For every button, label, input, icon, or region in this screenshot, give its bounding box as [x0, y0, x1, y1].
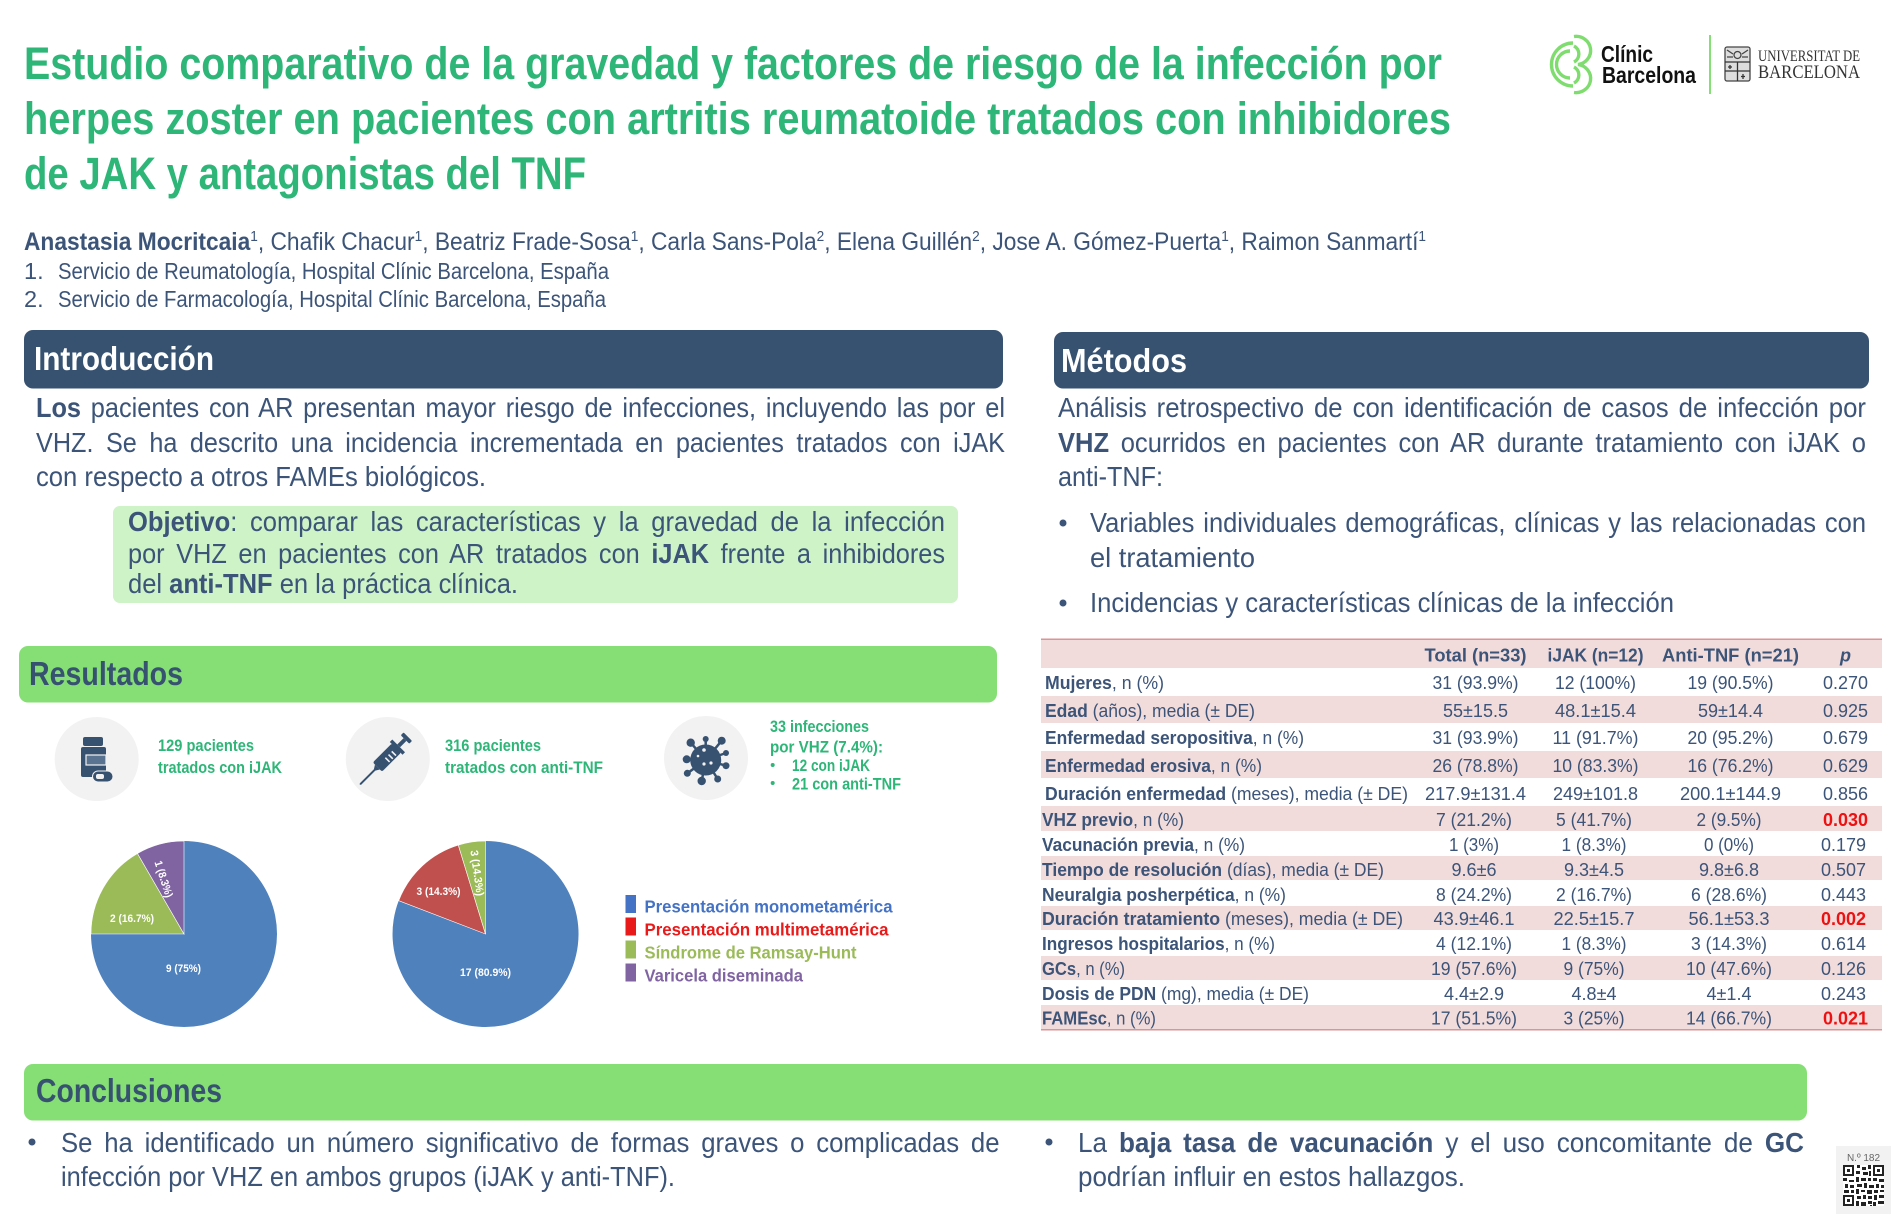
row: VHZ previo: 7 (21.2%)	[1436, 810, 1512, 830]
pie chart: anti-TNF: 3 (14.3%)	[416, 886, 461, 898]
bullet list: métodos: Incidencias y características clínicas de la infección	[1090, 587, 1674, 618]
panel: introducción	[24, 330, 1006, 603]
panel: conclusiones	[24, 1064, 1807, 1192]
text block: conclusion 2	[1046, 1127, 1804, 1192]
row: Neuralgia posherpética: Neuralgia posherpética, n (%)	[1042, 885, 1286, 905]
row: FAMEsc: 3 (25%)	[1564, 1008, 1624, 1028]
heading: métodos	[1054, 332, 1869, 388]
row: GCs	[1042, 959, 1866, 979]
row: GCs: 10 (47.6%)	[1686, 959, 1772, 979]
text block: introducción	[36, 392, 1006, 492]
authors: , Beatriz Frade-Sosa	[422, 228, 631, 256]
stat: infections: 33 infecciones	[770, 718, 869, 736]
title: Estudio comparativo de la gravedad y factores de riesgo de la infección por	[24, 38, 1442, 89]
row: Duración enfermedad	[1045, 784, 1868, 804]
title: de JAK y antagonistas del TNF	[24, 148, 586, 199]
table: patient characteristics	[1041, 638, 1882, 1030]
text block: introducción: Los pacientes con AR presentan mayor riesgo de infecciones, incluyendo las por el	[36, 392, 1005, 423]
row: Ingresos hospitalarios: 3 (14.3%)	[1691, 934, 1767, 954]
row: Duración tratamiento: Duración tratamiento (meses), media (± DE)	[1042, 909, 1403, 929]
title: herpes zoster en pacientes con artritis reumatoide tratados con inhibidores	[24, 93, 1451, 144]
row: Edad: 0.925	[1823, 701, 1868, 721]
text block: métodos: Análisis retrospectivo de con identificación de casos de infección por	[1058, 392, 1866, 423]
stat: iJAK patients	[158, 737, 282, 777]
row: Enfermedad erosiva	[1045, 756, 1868, 776]
logo: Universitat de Barcelona: BARCELONA	[1758, 63, 1861, 83]
table header: iJAK (n=12)	[1548, 646, 1644, 666]
row: Tiempo de resolución	[1042, 860, 1866, 880]
logos	[1552, 35, 1861, 94]
row: Neuralgia posherpética: 6 (28.6%)	[1691, 885, 1767, 905]
row: Duración tratamiento	[1042, 909, 1866, 929]
row: FAMEsc: 0.021	[1823, 1008, 1868, 1028]
row: Vacunación previa: 0.179	[1821, 835, 1866, 855]
row: Dosis de PDN: Dosis de PDN (mg), media (± DE)	[1042, 984, 1309, 1004]
row: Mujeres	[1045, 673, 1868, 693]
heading: conclusiones: Conclusiones	[36, 1072, 222, 1109]
row: Vacunación previa: 1 (3%)	[1449, 835, 1499, 855]
text block: conclusion 1: Se ha identificado un número significativo de formas graves o complicadas de	[61, 1127, 1000, 1158]
affiliations: Servicio de Farmacología, Hospital Clínic Barcelona, España	[58, 286, 607, 312]
authors: , Carla Sans-Pola	[638, 228, 817, 256]
authors: , Jose A. Gómez-Puerta	[980, 228, 1221, 256]
panel: resultados	[19, 646, 997, 1027]
row: Tiempo de resolución: 0.507	[1821, 860, 1866, 880]
row: Edad	[1045, 701, 1868, 721]
row: Enfermedad erosiva: 16 (76.2%)	[1688, 756, 1774, 776]
affiliations	[24, 258, 610, 312]
row: Duración enfermedad: Duración enfermedad (meses), media (± DE)	[1045, 784, 1408, 804]
stat: anti-TNF patients: tratados con anti-TNF	[445, 759, 603, 777]
authors: 1	[1418, 228, 1426, 245]
stat: anti-TNF patients	[445, 737, 603, 777]
row: Duración tratamiento: 43.9±46.1	[1434, 909, 1514, 929]
authors: , Raimon Sanmartí	[1229, 228, 1418, 256]
row: FAMEsc: FAMEsc, n (%)	[1042, 1008, 1156, 1028]
text block: métodos: VHZ ocurridos en pacientes con AR durante tratamiento con iJAK o	[1058, 427, 1866, 458]
pie chart: iJAK: 9 (75%)	[166, 963, 201, 975]
text block: conclusion 2: podrían influir en estos hallazgos.	[1078, 1161, 1465, 1192]
callout: objetivo	[113, 506, 958, 603]
row: Dosis de PDN	[1042, 984, 1866, 1004]
row: Tiempo de resolución: 9.6±6	[1452, 860, 1496, 880]
heading: resultados	[19, 646, 997, 702]
authors: , Elena Guillén	[824, 228, 972, 256]
authors: , Chafik Chacur	[258, 228, 415, 256]
text block: conclusion 1	[28, 1127, 1000, 1192]
row: Duración enfermedad: 249±101.8	[1553, 784, 1638, 804]
row: Mujeres: 19 (90.5%)	[1688, 673, 1774, 693]
row: GCs: 9 (75%)	[1564, 959, 1624, 979]
row: Enfermedad seropositiva: 0.679	[1823, 728, 1868, 748]
authors: 1	[250, 228, 258, 245]
stat: iJAK patients: 129 pacientes	[158, 737, 254, 755]
text block: conclusion 2: La baja tasa de vacunación y el uso concomitante de GC	[1078, 1127, 1804, 1158]
text block: métodos	[1058, 392, 1866, 492]
panel: métodos	[1054, 332, 1869, 618]
row: Tiempo de resolución: 9.3±4.5	[1564, 860, 1624, 880]
legend: Varicela diseminada	[644, 966, 803, 986]
logo: Universitat de Barcelona: UNIVERSITAT DE	[1758, 48, 1860, 65]
row: Duración enfermedad: 0.856	[1823, 784, 1868, 804]
row: Duración tratamiento: 0.002	[1821, 909, 1866, 929]
pie chart: anti-TNF: 17 (80.9%)	[460, 967, 511, 979]
row: Neuralgia posherpética: 8 (24.2%)	[1436, 885, 1512, 905]
row: Neuralgia posherpética	[1042, 885, 1866, 905]
row: GCs: 19 (57.6%)	[1431, 959, 1517, 979]
row: Enfermedad seropositiva: 20 (95.2%)	[1688, 728, 1774, 748]
title	[24, 38, 1451, 199]
authors: 1	[631, 228, 638, 245]
callout: objetivo: Objetivo: comparar las características y la gravedad de la infección	[128, 506, 945, 537]
legend: Presentación multimetamérica	[644, 920, 889, 940]
callout: objetivo: por VHZ en pacientes con AR tratados con iJAK frente a inhibidores	[128, 538, 945, 569]
table header: Total (n=33)	[1424, 646, 1526, 666]
row: Enfermedad seropositiva: 31 (93.9%)	[1432, 728, 1518, 748]
affiliations: Servicio de Reumatología, Hospital Clínic Barcelona, España	[58, 258, 610, 284]
row: Enfermedad seropositiva	[1045, 728, 1868, 748]
row: Duración tratamiento: 22.5±15.7	[1554, 909, 1634, 929]
callout: objetivo: del anti-TNF en la práctica clínica.	[128, 568, 518, 599]
stat: infections	[770, 718, 901, 794]
logo: Universitat de Barcelona	[1725, 47, 1861, 83]
row: Enfermedad seropositiva: 11 (91.7%)	[1552, 728, 1638, 748]
table header	[1424, 646, 1851, 666]
authors: 1	[1221, 228, 1229, 245]
row: VHZ previo: 0.030	[1823, 810, 1868, 830]
row: Dosis de PDN: 4±1.4	[1706, 984, 1752, 1004]
text block: conclusion 1: infección por VHZ en ambos grupos (iJAK y anti-TNF).	[61, 1161, 675, 1192]
row: Tiempo de resolución: Tiempo de resolución (días), media (± DE)	[1042, 860, 1384, 880]
pie chart: iJAK: 1 (8.3%)	[151, 859, 175, 900]
row: VHZ previo: 2 (9.5%)	[1696, 810, 1762, 830]
legend: Presentación monometamérica	[644, 896, 893, 916]
heading: conclusiones	[24, 1064, 1807, 1120]
bullet list: métodos	[1060, 507, 1866, 618]
row: Vacunación previa	[1042, 835, 1866, 855]
row: GCs: GCs, n (%)	[1042, 959, 1125, 979]
logo: Clínic Barcelona: Clínic	[1601, 41, 1653, 67]
authors: 2	[972, 228, 980, 245]
heading: métodos: Métodos	[1061, 342, 1187, 379]
table header: Anti-TNF (n=21)	[1662, 646, 1799, 666]
row: VHZ previo: 5 (41.7%)	[1556, 810, 1632, 830]
row: GCs: 0.126	[1821, 959, 1866, 979]
row: Duración tratamiento: 56.1±53.3	[1688, 909, 1770, 929]
stat: anti-TNF patients: 316 pacientes	[445, 737, 541, 755]
authors: 2	[817, 228, 824, 245]
affiliations: 2.	[24, 286, 44, 312]
row: Enfermedad erosiva: 10 (83.3%)	[1552, 756, 1638, 776]
authors: Anastasia Mocritcaia	[24, 228, 251, 256]
text block: introducción: VHZ. Se ha descrito una incidencia incrementada en pacientes tratados con iJAK	[36, 427, 1006, 458]
row: Ingresos hospitalarios: 4 (12.1%)	[1436, 934, 1512, 954]
row: Dosis de PDN: 0.243	[1821, 984, 1866, 1004]
row: Vacunación previa: Vacunación previa, n (%)	[1042, 835, 1245, 855]
row: Enfermedad erosiva: 0.629	[1823, 756, 1868, 776]
row: Ingresos hospitalarios: 1 (8.3%)	[1562, 934, 1626, 954]
row: Dosis de PDN: 4.4±2.9	[1444, 984, 1504, 1004]
row: Edad: 59±14.4	[1698, 701, 1763, 721]
bullet list: métodos: el tratamiento	[1090, 542, 1255, 573]
icon: syringe	[346, 717, 430, 801]
stat: infections: por VHZ (7.4%):	[770, 738, 883, 756]
pie chart: iJAK: 2 (16.7%)	[110, 913, 154, 925]
heading: introducción	[24, 330, 1003, 388]
row: Neuralgia posherpética: 0.443	[1821, 885, 1866, 905]
table header: p	[1839, 646, 1851, 666]
logo: Clínic Barcelona	[1552, 36, 1696, 93]
row: Vacunación previa: 1 (8.3%)	[1562, 835, 1626, 855]
row: Neuralgia posherpética: 2 (16.7%)	[1556, 885, 1632, 905]
row: Edad: 55±15.5	[1443, 701, 1508, 721]
legend: Síndrome de Ramsay-Hunt	[644, 942, 857, 962]
row: Ingresos hospitalarios: Ingresos hospitalarios, n (%)	[1042, 934, 1275, 954]
row: Edad: Edad (años), media (± DE)	[1045, 701, 1255, 721]
icon: virus	[664, 716, 748, 800]
pie chart: anti-TNF: 3 (14.3%)	[467, 850, 486, 897]
row: Duración enfermedad: 217.9±131.4	[1425, 784, 1526, 804]
logo: Clínic Barcelona: Barcelona	[1602, 62, 1696, 88]
row: Duración enfermedad: 200.1±144.9	[1680, 784, 1781, 804]
legend	[626, 895, 893, 986]
row: Mujeres: Mujeres, n (%)	[1045, 673, 1164, 693]
row: Ingresos hospitalarios: 0.614	[1821, 934, 1866, 954]
row: VHZ previo	[1042, 810, 1868, 830]
affiliations: 1.	[24, 258, 44, 284]
icon: medication bottle	[55, 717, 139, 801]
heading: resultados: Resultados	[29, 655, 183, 692]
row: Enfermedad erosiva: Enfermedad erosiva, n (%)	[1045, 756, 1262, 776]
row: FAMEsc	[1042, 1008, 1868, 1028]
qr code: N.º 182	[1847, 1153, 1880, 1164]
pie chart: anti-TNF	[393, 841, 579, 1027]
stat: iJAK patients: tratados con iJAK	[158, 759, 282, 777]
text block: introducción: con respecto a otros FAMEs biológicos.	[36, 461, 486, 492]
qr code	[1836, 1146, 1891, 1214]
row: Dosis de PDN: 4.8±4	[1572, 984, 1616, 1004]
row: Mujeres: 31 (93.9%)	[1432, 673, 1518, 693]
row: FAMEsc: 14 (66.7%)	[1686, 1008, 1772, 1028]
authors: 1	[415, 228, 422, 245]
row: Mujeres: 12 (100%)	[1555, 673, 1636, 693]
row: Vacunación previa: 0 (0%)	[1704, 835, 1754, 855]
row: Mujeres: 0.270	[1823, 673, 1868, 693]
row: Ingresos hospitalarios	[1042, 934, 1866, 954]
row: FAMEsc: 17 (51.5%)	[1431, 1008, 1517, 1028]
heading: introducción: Introducción	[34, 340, 214, 377]
stat: infections: 12 con iJAK	[792, 757, 870, 775]
row: VHZ previo: VHZ previo, n (%)	[1042, 810, 1184, 830]
row: Enfermedad seropositiva: Enfermedad seropositiva, n (%)	[1045, 728, 1304, 748]
stat: infections: 21 con anti-TNF	[792, 776, 901, 794]
pie chart: iJAK	[91, 841, 277, 1027]
text block: métodos: anti-TNF:	[1058, 461, 1163, 492]
row: Edad: 48.1±15.4	[1555, 701, 1636, 721]
row: Tiempo de resolución: 9.8±6.8	[1699, 860, 1759, 880]
row: Enfermedad erosiva: 26 (78.8%)	[1432, 756, 1518, 776]
